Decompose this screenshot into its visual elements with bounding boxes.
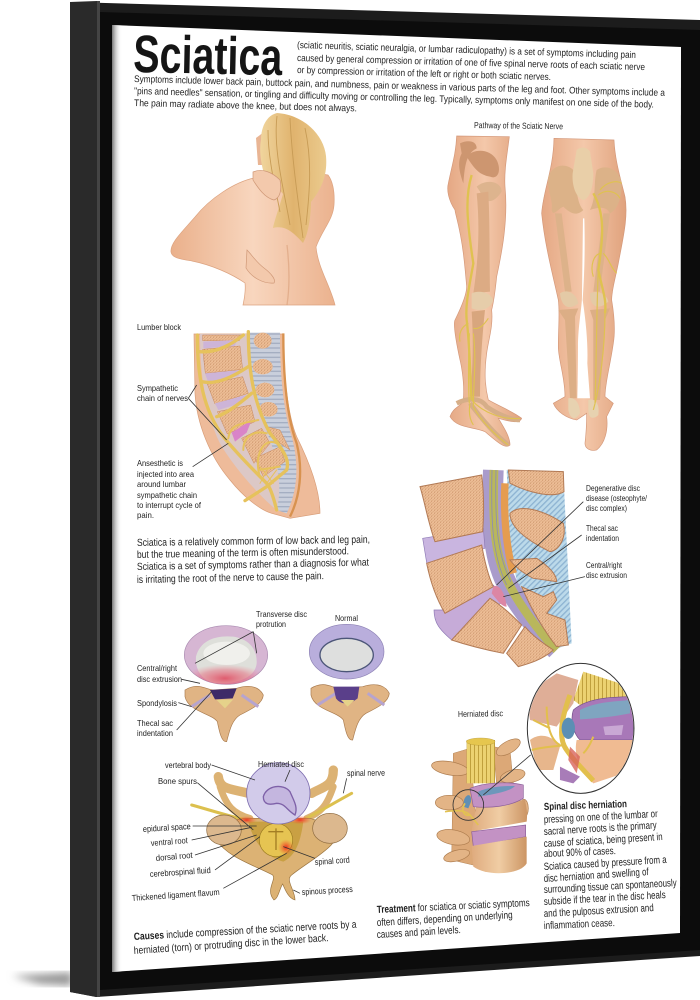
- title: Sciatica: [133, 25, 283, 87]
- text block: causes: Causes include compression of the sciatic nerve roots by a: [134, 920, 357, 943]
- illustration: vertebra cross section with herniated disc: [192, 763, 352, 900]
- labels: lumbar block callouts: to interrupt cycle of: [137, 500, 202, 510]
- labels: axial disc callouts: indentation: [137, 728, 173, 738]
- intro text: [134, 40, 666, 114]
- illustration: woman holding her back: [171, 113, 335, 305]
- text block: spinal disc herniation: cause of sciatica, being present in: [544, 832, 663, 850]
- text block: treatment: often differs, depending on underlying: [377, 910, 513, 929]
- label: pathway of the sciatic nerve: Pathway of the Sciatic Nerve: [474, 120, 563, 131]
- labels: sagittal section callouts: Degenerative disc: [586, 483, 641, 493]
- labels: vertebra cross section callouts: epidural space: [143, 821, 191, 834]
- labels: vertebra cross section callouts: spinal nerve: [347, 768, 385, 778]
- labels: axial disc callouts: Central/right: [137, 663, 178, 673]
- labels: sagittal section callouts: disc extrusion: [586, 570, 627, 580]
- labels: axial disc callouts: Thecal sac: [137, 718, 174, 728]
- text block: what sciatica is: Sciatica is a relatively common form of low back and leg pain,: [137, 535, 370, 549]
- text block: spinal disc herniation: pressing on one of the lumbar or: [544, 809, 658, 826]
- text block: what sciatica is: [137, 535, 370, 586]
- labels: lumbar block callouts: around lumbar: [137, 479, 186, 489]
- labels: axial disc callouts: Spondylosis: [137, 698, 177, 708]
- intro text: (sciatic neuritis, sciatic neuralgia, or lumbar radiculopathy) is a set of symptoms including pain: [297, 40, 636, 61]
- illustration: lumbar block section: [188, 332, 320, 518]
- labels: lumbar block callouts: [137, 383, 202, 520]
- labels: sagittal section callouts: [586, 483, 647, 580]
- text block: causes: [133, 920, 357, 957]
- labels: vertebra cross section callouts: Herniated disc: [258, 759, 305, 769]
- labels: lumbar block callouts: Ansesthetic is: [137, 458, 183, 468]
- illustration: axial discs, protrusion and normal: [177, 624, 389, 742]
- labels: lumbar block callouts: Sympathetic: [137, 383, 179, 393]
- label: lumber block: Lumber block: [137, 322, 182, 332]
- labels: sagittal section callouts: disc complex): [586, 503, 627, 513]
- text block: what sciatica is: but the true meaning of the term is often misunderstood.: [137, 546, 349, 561]
- labels: vertebra cross section callouts: Bone spurs: [158, 776, 197, 786]
- text block: treatment: causes and pain levels.: [377, 925, 461, 941]
- labels: vertebra cross section callouts: cerebrospinal fluid: [149, 865, 211, 879]
- labels: vertebra cross section callouts: spinal cord: [314, 855, 350, 867]
- label: herniated disc: Herniated disc: [458, 708, 504, 719]
- intro text: The pain may radiate above the knee, but does not always.: [134, 98, 357, 114]
- labels: axial disc callouts: Normal: [335, 613, 358, 623]
- text block: spinal disc herniation: about 90% of cases.: [544, 846, 616, 860]
- text block: causes: herniated (torn) or protruding disc in the lower back.: [133, 933, 329, 957]
- labels: vertebra cross section callouts: spinous process: [302, 884, 353, 897]
- labels: vertebra cross section callouts: [131, 759, 385, 903]
- labels: sagittal section callouts: Thecal sac: [586, 523, 619, 533]
- text block: treatment: [377, 898, 530, 941]
- illustration: herniated spine segment with magnified inset: [430, 663, 637, 873]
- labels: lumbar block callouts: chain of nerves: [137, 393, 188, 403]
- illustration: legs back view: [542, 138, 626, 450]
- text block: what sciatica is: Sciatica is a set of symptoms rather than a diagnosis for what: [137, 558, 369, 573]
- canvas sheet: [112, 25, 681, 972]
- text block: spinal disc herniation: sacral nerve roots is the primary: [544, 820, 658, 838]
- labels: lumbar block callouts: sympathetic chain: [137, 490, 197, 500]
- intro text: caused by general compression or irritation of one of five spinal nerve roots of each sciatic nerve: [297, 53, 645, 73]
- labels: sagittal section callouts: indentation: [586, 533, 619, 543]
- labels: sagittal section callouts: Central/right: [586, 560, 622, 570]
- text block: spinal disc herniation: disc herniation and swelling of: [543, 867, 649, 885]
- labels: axial disc callouts: [137, 609, 358, 738]
- labels: axial disc callouts: protrution: [256, 619, 286, 629]
- labels: sagittal section callouts: disease (osteophyte/: [586, 493, 647, 503]
- labels: vertebra cross section callouts: ventral root: [150, 835, 189, 848]
- labels: lumbar block callouts: pain.: [137, 510, 154, 520]
- text block: spinal disc herniation: [543, 799, 678, 932]
- illustration: leg side view: [448, 136, 522, 446]
- text block: what sciatica is: is irritating the root of the nerve to cause the pain.: [137, 571, 324, 586]
- labels: vertebra cross section callouts: vertebral body: [165, 760, 212, 770]
- text block: spinal disc herniation: and the pulposus extrusion and: [544, 903, 654, 920]
- labels: axial disc callouts: Transverse disc: [256, 609, 308, 619]
- text block: spinal disc herniation: inflammation cease.: [544, 918, 615, 932]
- labels: lumbar block callouts: injected into area: [137, 469, 194, 479]
- labels: vertebra cross section callouts: Thickened ligament flavum: [131, 887, 220, 903]
- text block: spinal disc herniation: Spinal disc herniation: [544, 799, 627, 813]
- illustration: lumbar spine sagittal section: [420, 470, 585, 667]
- labels: vertebra cross section callouts: dorsal root: [155, 850, 194, 863]
- text block: treatment: Treatment for sciatica or sciatic symptoms: [377, 898, 530, 916]
- labels: axial disc callouts: disc extrusion: [137, 674, 182, 684]
- text block: spinal disc herniation: subside if the tear in the disc heals: [544, 890, 666, 908]
- frame shadow: [12, 972, 72, 986]
- intro text: or by compression or irritation of the left or right or both sciatic nerves.: [297, 65, 551, 83]
